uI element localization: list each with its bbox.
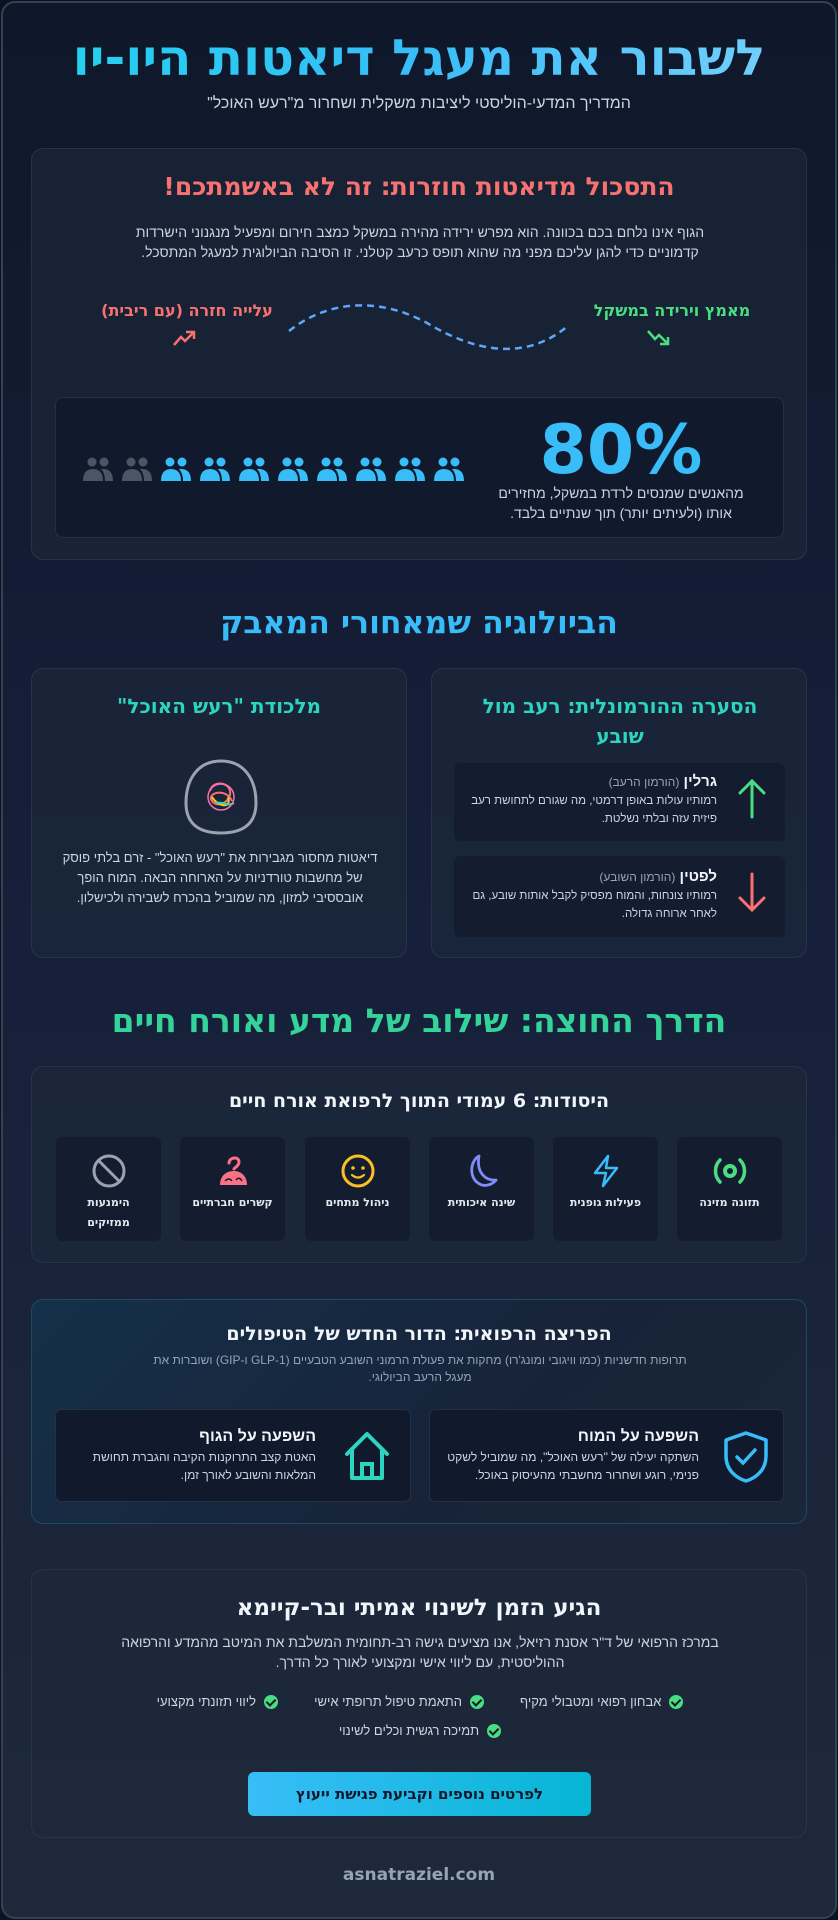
text: body <box>93 1428 316 1482</box>
tile: social <box>180 1137 285 1241</box>
heading: hormones: הסערה ההורמונלית: רעב מול שובע <box>483 694 757 748</box>
paragraph: food noise: דיאטות מחסור מגבירות את "רעש האוכל" - זרם בלתי פוסק של מחשבות טורדניות על הארוחה הבאה. המוח הופך אובססיבי למזון, מה שמוביל בהכרח לשבירה ולכישלון. <box>63 850 377 905</box>
text: body: השפעה על הגוף <box>199 1428 316 1445</box>
ghrelin text: גרלין (הורמון הרעב) <box>609 773 717 790</box>
tile: sleep <box>429 1137 534 1241</box>
icon: house <box>344 1432 390 1480</box>
subtitle: המדריך המדעי-הוליסטי ליציבות משקלית ושחרור מ"רעש האוכל" <box>207 95 631 112</box>
panel: hormonal storm <box>431 668 807 958</box>
text: brain: השתקה יעילה של "רעש האוכל", מה שמוביל לשקט פנימי, רוגע ושחרור מחשבתי מהעיסוק באוכל. <box>447 1450 699 1482</box>
title: לשבור את מעגל דיאטות היו-יו <box>73 29 765 87</box>
leptin text <box>472 868 717 920</box>
item: nutrition: ליווי תזונתי מקצועי <box>157 1694 256 1709</box>
heading: biology: הביולוגיה שמאחורי המאבק <box>220 605 618 641</box>
people icons row <box>83 458 464 481</box>
icon: arrow up <box>738 779 766 818</box>
label: weight loss: מאמץ וירידה במשקל <box>594 301 750 320</box>
tile: physical activity <box>553 1137 658 1241</box>
heading: frustration: התסכול מדיאטות חוזרות: זה לא באשמתכם! <box>163 172 675 201</box>
paragraph: medical: תרופות חדשניות (כמו וויגובי ומונג'רו) מחקות את פעולת הרמוני השובע הטבעיים (GLP-1 ו-GIP) ושוברות את מעגל הרעב הביולוגי. <box>153 1353 687 1384</box>
stat: 80%: 80% <box>540 411 702 490</box>
item: diagnosis: אבחון רפואי ומטבולי מקיף <box>520 1694 661 1709</box>
ghrelin box <box>454 763 785 841</box>
stat caption: מהאנשים שמנסים לרדת במשקל, מחזירים אותו (ולעיתים יותר) תוך שנתיים בלבד. <box>498 485 744 521</box>
tile: nutrition <box>677 1137 782 1241</box>
tile: avoiding harmful: ממזיקים <box>87 1216 130 1229</box>
icon: head with tangled thoughts <box>184 760 258 834</box>
wave: yo-yo curve <box>288 304 566 350</box>
item: emotional: תמיכה רגשית וכלים לשינוי <box>339 1723 479 1738</box>
tile: physical activity: פעילות גופנית <box>570 1196 641 1209</box>
panel: six pillars <box>31 1066 807 1263</box>
box: body effect <box>55 1409 411 1502</box>
icon: arrow down <box>738 872 766 912</box>
tile: social: קשרים חברתיים <box>192 1196 273 1209</box>
heading: food noise: מלכודת "רעש האוכל" <box>117 694 321 718</box>
ghrelin text: רמותיו עולות באופן דרמטי, מה שגורם לתחושת רעב פיזית עזה ובלתי נשלטת. <box>471 795 717 825</box>
heading: pillars: היסודות: 6 עמודי התווך לרפואת אורח חיים <box>229 1090 609 1112</box>
box: brain effect <box>429 1409 784 1502</box>
stat box <box>55 397 784 538</box>
tile: nutrition: תזונה מזינה <box>699 1196 760 1209</box>
text: brain <box>447 1428 699 1482</box>
paragraph: body explanation: הגוף אינו נלחם בכם בכוונה. הוא מפרש ירידה מהירה במשקל כמצב חירום ומפעיל מנגנוני הישרדות קדמוניים כדי להגן עליכם מפני מה שהוא תופס כרעב קטלני. זו הסיבה הביולוגית למעגל המתסכל. <box>136 224 704 260</box>
panel: medical breakthrough <box>31 1299 807 1524</box>
leptin text: רמותיו צונחות, והמוח מפסיק לקבל אותות שובע, גם לאחר ארוחה גדולה. <box>472 890 717 920</box>
tile: stress <box>305 1137 410 1241</box>
text: body: האטת קצב התרוקנות הקיבה והגברת תחושת המלאות והשובע לאורך זמן. <box>93 1450 316 1482</box>
heading: the way out: הדרך החוצה: שילוב של מדע ואורח חיים <box>112 1001 726 1040</box>
panel: food noise trap <box>31 668 407 958</box>
ghrelin text <box>471 773 717 825</box>
tile: stress: ניהול מתחים <box>326 1196 389 1209</box>
tile: avoiding harmful <box>56 1137 161 1241</box>
panel: frustration <box>31 148 807 560</box>
button: CTA <box>248 1772 591 1816</box>
tile: sleep: שינה איכותית <box>448 1196 515 1209</box>
icon: trend up <box>173 330 196 346</box>
item: medication: התאמת טיפול תרופתי אישי <box>314 1694 462 1709</box>
heading: CTA: הגיע הזמן לשינוי אמיתי ובר-קיימא <box>237 1595 601 1621</box>
footer: asnatraziel.com <box>343 1865 495 1885</box>
text: brain: השפעה על המוח <box>578 1428 699 1445</box>
leptin box <box>454 856 785 937</box>
tile: avoiding harmful: הימנעות <box>87 1196 130 1209</box>
icon: trend down <box>647 330 670 346</box>
paragraph: CTA: במרכז הרפואי של ד"ר אסנת רזיאל, אנו מציעים גישה רב-תחומית המשלבת את המיטב מהמדע והרפואה ההוליסטית, עם ליווי אישי ומקצועי לאורך כל הדרך. <box>121 1634 719 1670</box>
checklist <box>157 1694 683 1738</box>
label: regain: עלייה חזרה (עם ריבית) <box>101 301 273 320</box>
heading: medical: הפריצה הרפואית: הדור החדש של הטיפולים <box>226 1323 612 1345</box>
leptin text: לפטין (הורמון השובע) <box>599 868 717 885</box>
icon: shield <box>724 1431 768 1483</box>
panel: call to action <box>31 1569 807 1838</box>
button: CTA: לפרטים נוספים וקביעת פגישת ייעוץ <box>296 1785 543 1803</box>
